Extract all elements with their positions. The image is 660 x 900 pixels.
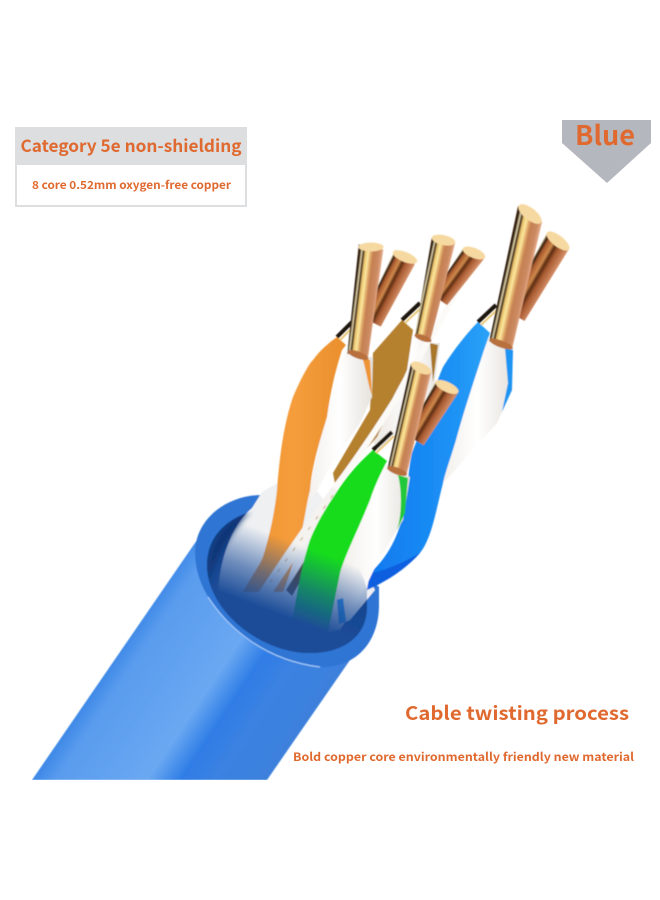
brown pair conductors: [411, 233, 487, 344]
feature description: Bold copper core environmentally friendly new material: [293, 749, 634, 765]
feature heading: Cable twisting process: [405, 699, 629, 726]
infographic canvas: [15, 120, 651, 780]
blue pair conductors: [488, 201, 572, 352]
spec label heading: Category 5e non-shielding: [20, 132, 242, 157]
twisted white filler thread: [262, 290, 457, 598]
brown wire pair: [333, 320, 440, 484]
jacket opening: [207, 513, 368, 636]
colour badge: [562, 114, 651, 183]
rim highlight: [208, 597, 320, 667]
colour badge: Blue: [575, 114, 635, 153]
cable illustration: [32, 201, 572, 780]
white filler wires in the opening: [218, 482, 376, 622]
cable jacket body: [32, 540, 350, 780]
spec label panel: [15, 127, 247, 207]
jacket rim: [195, 495, 379, 667]
green pair conductors: [386, 359, 460, 478]
green wire pair: [290, 450, 410, 637]
blue wire pair: [367, 322, 513, 590]
orange wire pair: [243, 337, 373, 592]
exposed twisted-pair strand bases: [337, 303, 498, 453]
spec label detail: 8 core 0.52mm oxygen-free copper: [32, 177, 231, 193]
copper conductors: [345, 201, 572, 478]
inner opening shadow: [208, 512, 368, 653]
orange pair conductors: [345, 242, 419, 362]
